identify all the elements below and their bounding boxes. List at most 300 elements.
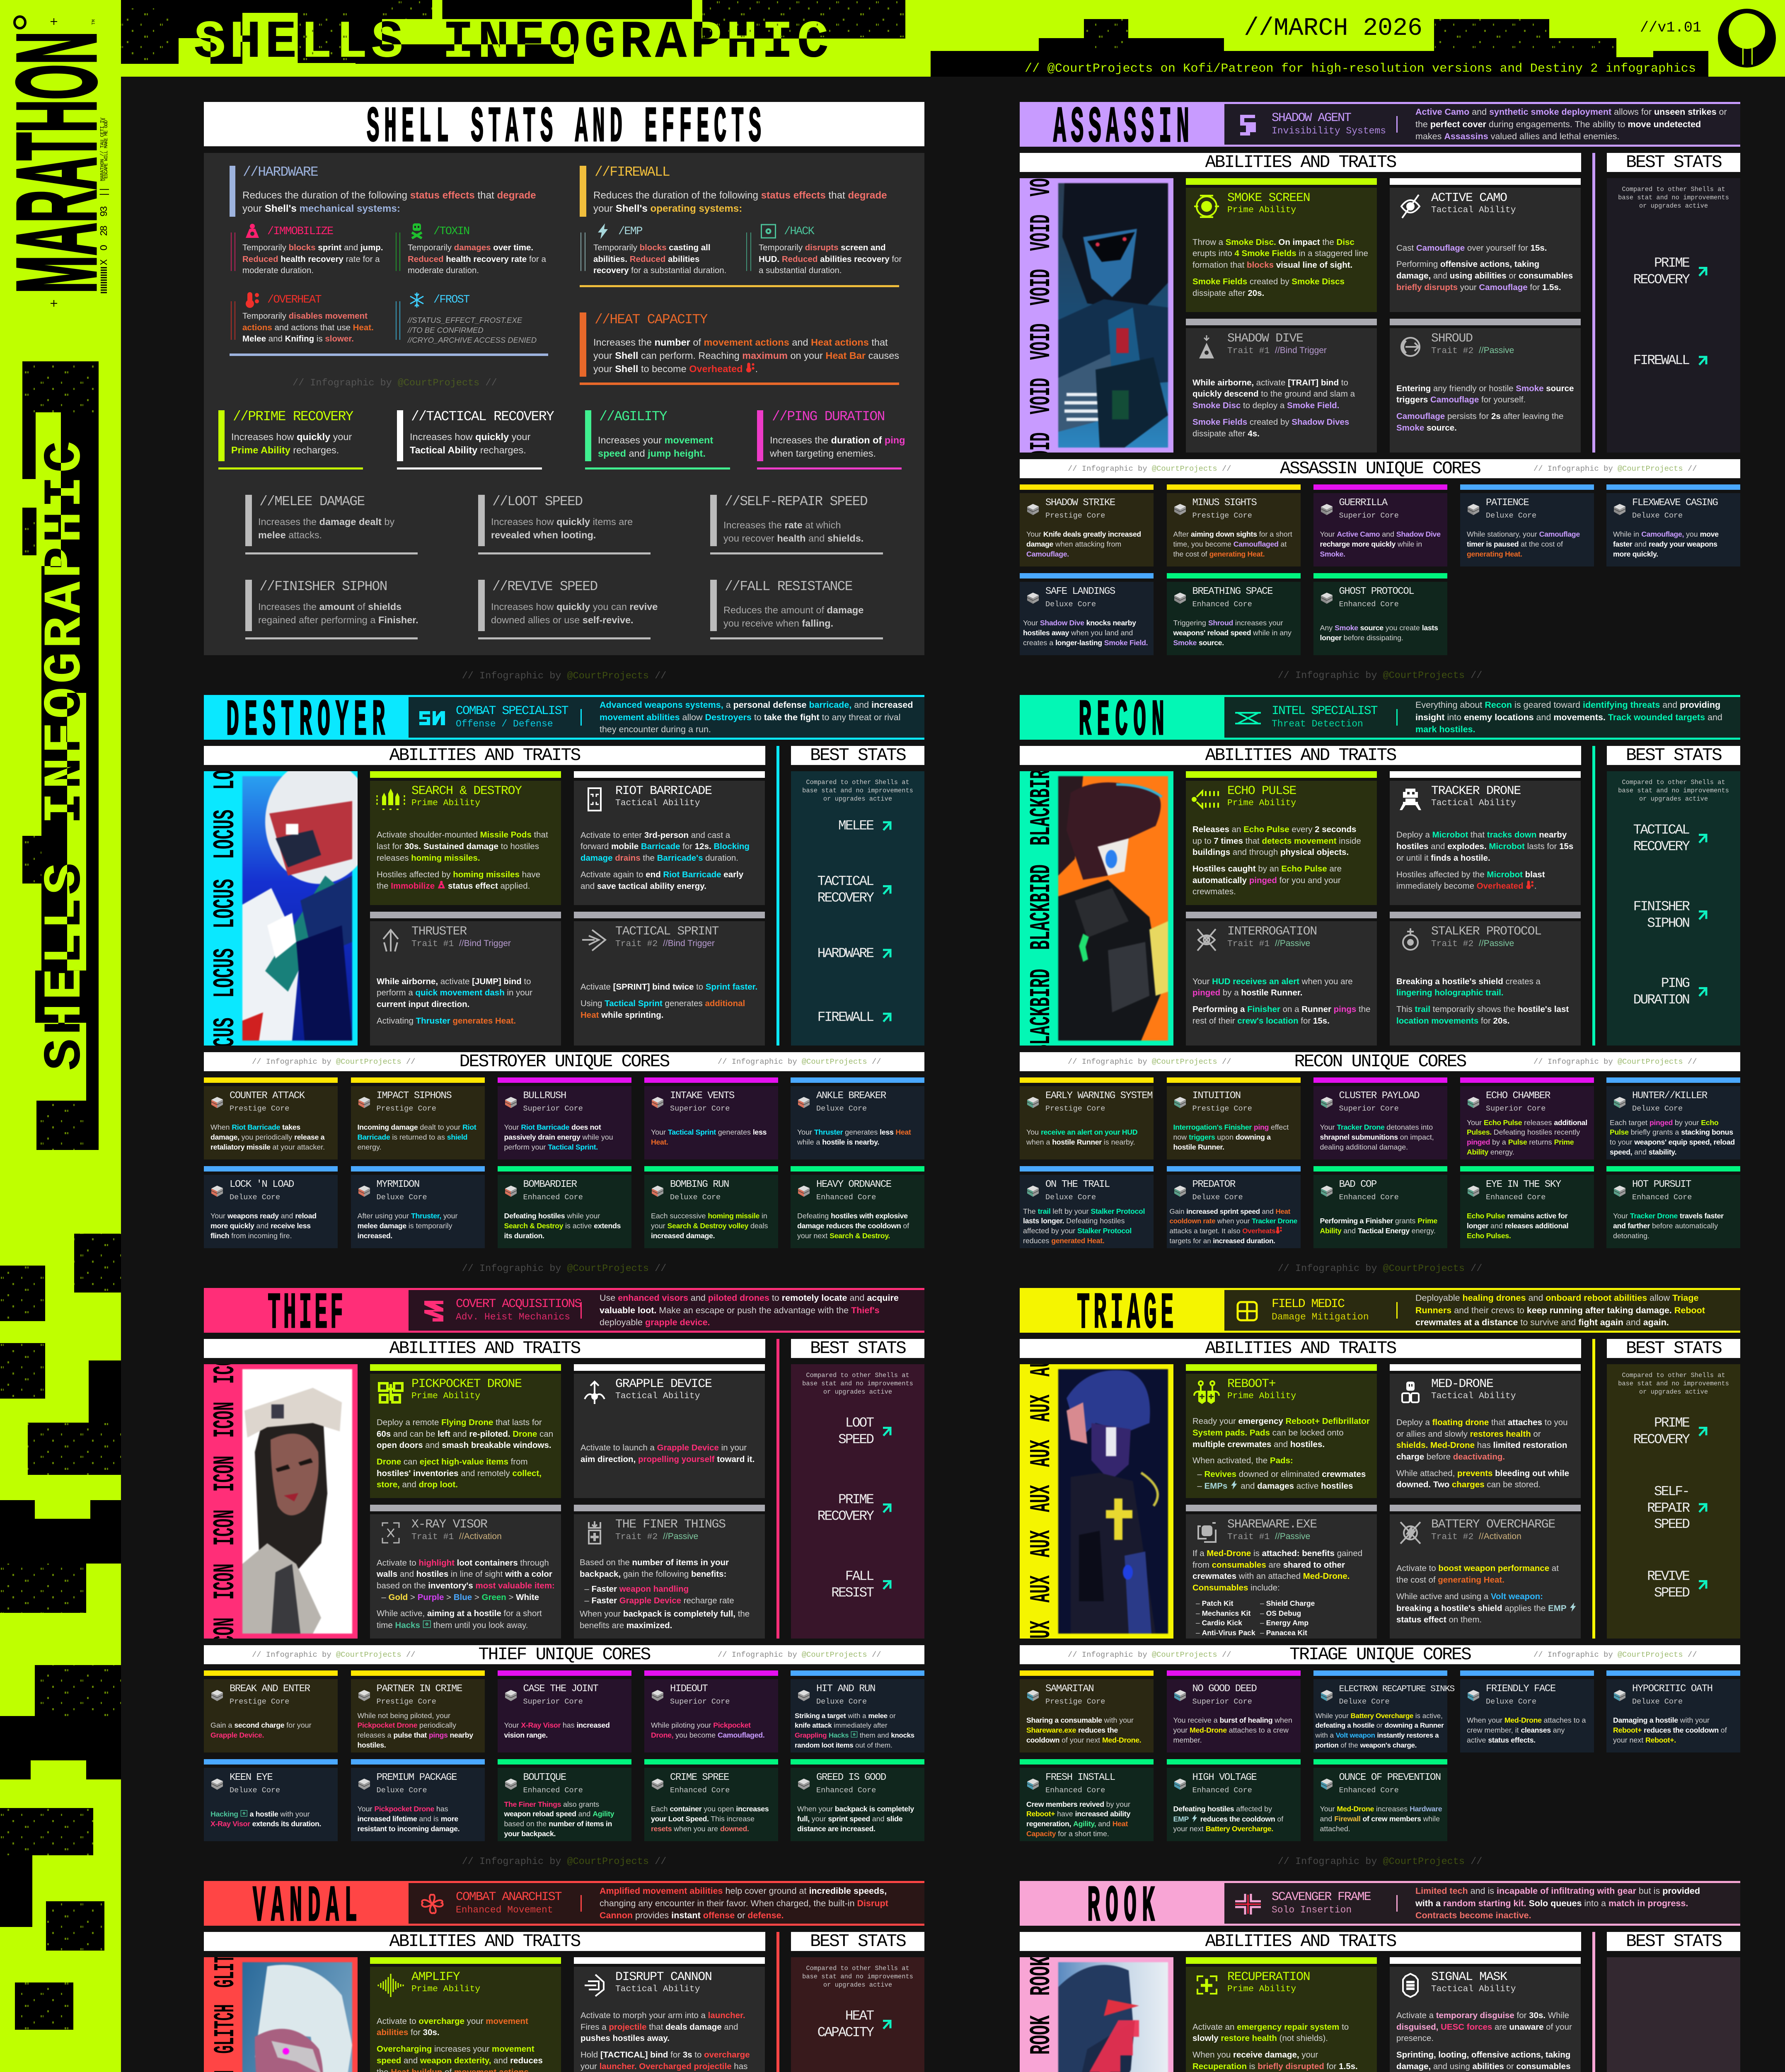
- core: break and enter: Gain a second charge for your: [210, 1721, 312, 1729]
- core: fresh install: Enhanced Core: [1045, 1786, 1105, 1795]
- section: destroyer: [204, 695, 924, 1288]
- core: minus sights: After aiming down sights for a short: [1173, 530, 1292, 538]
- ability: recuperation: Prime Ability: [1227, 1984, 1296, 1994]
- core: samaritan: Shareware.exe reduces the: [1026, 1726, 1118, 1734]
- stat: prime recovery: [1633, 1415, 1689, 1448]
- shell description header: [409, 1881, 924, 1926]
- core: counter attack: COUNTER ATTACK: [230, 1090, 305, 1101]
- core: no good deed: NO GOOD DEED: [1192, 1683, 1256, 1694]
- icon: tactical sprint: [580, 927, 610, 952]
- icon: search and destroy: [376, 787, 406, 812]
- core: echo chamber: Pulses. Defeating hostiles recently: [1467, 1128, 1580, 1136]
- status: immobilize: /IMMOBILIZE: [267, 225, 333, 238]
- core: lock n load: flinch from incoming fire.: [210, 1232, 292, 1240]
- panel: best stats: or upgrades active: [823, 1981, 892, 1989]
- ability: reboot+: Prime Ability: [1227, 1391, 1296, 1401]
- heading: best stats: BEST STATS: [810, 1931, 905, 1951]
- ability: reboot+: multiple crewmates and hostiles.: [1192, 1440, 1325, 1449]
- core: ghost protocol: Enhanced Core: [1339, 600, 1399, 609]
- shell description header: valuable loot. Make an escape or push the advantage with the Thief's: [600, 1305, 880, 1315]
- status: hack: a substantial duration.: [759, 266, 842, 275]
- trait: tactical sprint: Trait #2 //Bind Trigger: [615, 939, 715, 949]
- core: hot pursuit: detonating.: [1613, 1232, 1650, 1240]
- ability: signal mask: SIGNAL MASK: [1431, 1970, 1507, 1984]
- panel: best stats: [791, 771, 924, 1046]
- trait: stalker protocol: STALKER PROTOCOL: [1431, 925, 1541, 939]
- core: no good deed: Superior Core: [1192, 1697, 1252, 1706]
- footer watermark: // Infographic by @CourtProjects //: [1278, 670, 1482, 681]
- core: early warning system: Prestige Core: [1045, 1104, 1105, 1113]
- stat: fall resistance: Reduces the amount of damage: [723, 605, 863, 615]
- core: myrmidon: MYRMIDON: [376, 1179, 419, 1190]
- icon: signal mask: [1396, 1973, 1425, 1998]
- shell name: [1020, 1881, 1224, 1926]
- stat: hardware: //HARDWARE: [243, 165, 318, 180]
- stat: loot speed: LOOT: [845, 1416, 873, 1431]
- core: ghost protocol: Any Smoke source you create lasts: [1320, 624, 1438, 632]
- shell description header: makes Assassins valued allies and lethal enemies.: [1415, 131, 1619, 141]
- stat: firewall: your Shell's operating systems:: [593, 203, 742, 214]
- heading: abilities and traits: [1020, 746, 1581, 765]
- trait: thruster: perform a quick movement dash in your: [377, 988, 532, 997]
- ability: amplify: abilities for 30s.: [377, 2028, 440, 2037]
- trait: interrogation: Performing a Finisher on a Runner pings the: [1192, 1005, 1371, 1014]
- ability: reboot+: System pads. Pads can be locked onto: [1192, 1428, 1344, 1438]
- core: counter attack: When Riot Barricade takes: [210, 1123, 300, 1131]
- icon: the finer things: [580, 1520, 610, 1545]
- shell description header: crewmates at a distance to survive and fight again and again.: [1415, 1317, 1669, 1327]
- heading: abilities and traits: [204, 1339, 765, 1358]
- core: bullrush: Superior Core: [523, 1104, 583, 1113]
- icon: shareware.exe: [1192, 1520, 1221, 1545]
- icon: x-ray visor: [376, 1520, 406, 1545]
- core: samaritan: Sharing a consumable with your: [1026, 1716, 1134, 1724]
- core: guerrilla: Your Active Camo and Shadow Dive: [1320, 530, 1441, 538]
- shell description header: [1224, 102, 1740, 147]
- heading: best stats: [1607, 1932, 1740, 1951]
- stat: ping duration: when targeting enemies.: [770, 448, 876, 459]
- icon: shroud: [1396, 334, 1425, 359]
- core: patience: PATIENCE: [1486, 497, 1529, 508]
- core: fresh install: regeneration, Agility, and Heat: [1026, 1820, 1128, 1828]
- ability: search & destroy: releases homing missiles.: [377, 853, 480, 863]
- trait: battery overcharge: status effect on them.: [1396, 1615, 1482, 1624]
- ability: grapple device: [574, 1364, 765, 1498]
- heading: best stats: BEST STATS: [1626, 1931, 1721, 1951]
- core: hunter killer: HUNTER//KILLER: [1632, 1090, 1707, 1101]
- trait: x-ray visor: X-RAY VISOR: [411, 1518, 487, 1532]
- core: intake vents: INTAKE VENTS: [670, 1090, 734, 1101]
- ability: smoke screen: erupts into 4 Smoke Fields in a staggered line: [1192, 249, 1368, 258]
- ability: recuperation: Activate an emergency repair system to: [1192, 2022, 1349, 2032]
- core: ounce of prevention: and Firewall of crew members while: [1320, 1815, 1440, 1823]
- status: toxin: Temporarily damages over time.: [408, 243, 533, 252]
- trait: x-ray visor: walls and hostiles in line of sight with a color: [377, 1569, 552, 1579]
- stat: fall resist: RESIST: [831, 1585, 873, 1600]
- stat: prime recovery: PRIME: [1654, 255, 1689, 271]
- stat: agility: speed and jump height.: [598, 448, 706, 459]
- core: bombing run: Each successive homing missile in: [651, 1212, 767, 1220]
- shell description header: with a random starting kit. Solo queues into a match in progress.: [1415, 1898, 1688, 1908]
- shell description header: [409, 1288, 924, 1333]
- core: cluster payload: [1313, 1077, 1447, 1159]
- ability: search & destroy: SEARCH & DESTROY: [411, 784, 522, 798]
- ability: grapple device: Activate to launch a Grapple Device in your: [580, 1443, 747, 1452]
- status: frost: [396, 292, 549, 342]
- core: minus sights: MINUS SIGHTS: [1192, 497, 1256, 508]
- stat: revive speed: SPEED: [1654, 1585, 1689, 1600]
- core: myrmidon: melee damage is temporarily: [357, 1222, 452, 1230]
- core: ankle breaker: [791, 1077, 924, 1159]
- trait: x-ray visor: time Hacks them until you look away.: [377, 1621, 528, 1630]
- heading: unique cores: DESTROYER UNIQUE CORES: [459, 1051, 669, 1072]
- core: hideout: Superior Core: [670, 1697, 730, 1706]
- core: bombing run: Deluxe Core: [670, 1193, 721, 1202]
- shell description header: Offense / Defense: [456, 719, 553, 729]
- icon: field medic: [1234, 1301, 1262, 1322]
- ability: disrupt cannon: Activate to morph your arm into a launcher.: [580, 2011, 745, 2020]
- trait: tactical sprint: Heat while sprinting.: [580, 1010, 663, 1020]
- core: case the joint: CASE THE JOINT: [523, 1683, 598, 1694]
- core: lock n load: Deluxe Core: [230, 1193, 280, 1202]
- core: premium package: PREMIUM PACKAGE: [376, 1772, 457, 1783]
- stat: prime recovery: Prime Ability recharges.: [231, 445, 339, 455]
- ability: tracker drone: or until it finds a hostile.: [1396, 853, 1490, 863]
- shell description header: Use enhanced visors and piloted drones to remotely locate and acquire: [600, 1293, 899, 1303]
- trait: interrogation: Trait #1 //Passive: [1227, 939, 1310, 949]
- panel: shell stats and effects: [204, 102, 924, 682]
- trait: shareware.exe: [1186, 1505, 1377, 1639]
- core: intake vents: Superior Core: [670, 1104, 730, 1113]
- stat: tactical recovery: Increases how quickly your: [410, 431, 530, 442]
- panel: best stats: [791, 1957, 924, 2072]
- stat: heat capacity: [818, 2008, 873, 2041]
- core: case the joint: [497, 1670, 631, 1752]
- trait: tactical sprint: [574, 912, 765, 1046]
- core: impact siphons: Incoming damage dealt to your Riot: [357, 1123, 476, 1131]
- core: breathing space: weapons' reload speed while in any: [1173, 629, 1292, 637]
- stat: agility: Increases your movement: [598, 435, 713, 445]
- stat: tactical recovery: RECOVERY: [1633, 839, 1689, 854]
- core: lock n load: LOCK 'N LOAD: [230, 1179, 294, 1190]
- core: eye in the sky: [1460, 1166, 1594, 1248]
- stat: finisher siphon: //FINISHER SIPHON: [259, 579, 387, 594]
- core: flexweave casing: faster and ready your weapons: [1613, 540, 1717, 548]
- trait: battery overcharge: While active and using a Volt weapon:: [1396, 1592, 1543, 1601]
- panel: best stats: Compared to other Shells at: [1622, 1372, 1725, 1379]
- watermark: // Infographic by @CourtProjects //: [293, 378, 497, 389]
- status: emp: [580, 223, 737, 273]
- core: guerrilla: Superior Core: [1339, 511, 1399, 520]
- trait: thruster: Activating Thruster generates Heat.: [377, 1016, 516, 1026]
- core: high voltage: Enhanced Core: [1192, 1786, 1252, 1795]
- core: lock n load: Your weapons ready and reload: [210, 1212, 317, 1220]
- logo: MARATHON wordmark: TM: [92, 19, 97, 25]
- icon: scavenger frame: [1234, 1894, 1262, 1915]
- ability: grapple device: aim direction, propelling yourself toward it.: [580, 1455, 755, 1464]
- core: samaritan: cooldown of your next Med-Drone.: [1026, 1736, 1141, 1744]
- core: impact siphons: energy.: [357, 1143, 381, 1151]
- core: myrmidon: increased.: [357, 1232, 392, 1240]
- core: ounce of prevention: Your Med-Drone increases Hardware: [1320, 1805, 1442, 1813]
- core: early warning system: You receive an alert on your HUD: [1026, 1128, 1137, 1136]
- shell description header: movement abilities allow Destroyers to take the fight to any threat or rival: [600, 712, 901, 722]
- core: crime spree: your Loot Speed. This increase: [651, 1815, 755, 1823]
- shell description header: the perfect cover during engagements. The ability to move undetected: [1415, 119, 1701, 129]
- core: partner in crime: Prestige Core: [376, 1697, 436, 1706]
- ability: tracker drone: hostiles and explodes. Microbot lasts for 15s: [1396, 842, 1573, 851]
- core: guerrilla: [1313, 484, 1447, 566]
- shell description header: Everything about Recon is geared toward identifying threats and providing: [1415, 700, 1720, 710]
- core: safe landings: Deluxe Core: [1045, 600, 1096, 609]
- core: greed is good: full, your sprint speed and slide: [797, 1815, 902, 1823]
- core: intuition: now triggers upon downing a: [1173, 1133, 1271, 1141]
- ability: signal mask: Activate a temporary disguise for 30s. While: [1396, 2011, 1569, 2020]
- core: fresh install: Reboot+ have increased ability: [1026, 1810, 1130, 1818]
- core: bullrush: [497, 1077, 631, 1159]
- ability: amplify: Overcharging increases your movement: [377, 2044, 535, 2054]
- ability: recuperation: Recuperation is briefly disrupted for 1.5s.: [1192, 2062, 1358, 2071]
- icon: stalker protocol: [1396, 927, 1425, 952]
- stat: heat capacity: Increases the number of movement actions and Heat actions that: [593, 337, 888, 348]
- status: frost: /FROST: [433, 294, 469, 306]
- core: guerrilla: Smoke.: [1320, 550, 1345, 558]
- trait: shareware.exe: Consumables include:: [1192, 1583, 1280, 1593]
- status: frost: //CRYO_ARCHIVE ACCESS DENIED: [408, 336, 537, 344]
- heading: best stats: [1607, 153, 1740, 172]
- ability: riot barricade: RIOT BARRICADE: [615, 784, 711, 798]
- shell description header: Contracts become inactive.: [1415, 1910, 1531, 1920]
- core: fresh install: FRESH INSTALL: [1045, 1772, 1115, 1783]
- trait: the finer things: [574, 1505, 765, 1639]
- heading: abilities and traits: [204, 746, 765, 765]
- core: bad cop: Enhanced Core: [1339, 1193, 1399, 1202]
- core: on the trail: reduces generated Heat.: [1023, 1237, 1104, 1245]
- ability: reboot+: When activated, the Pads:: [1192, 1456, 1293, 1465]
- stat: ping duration: PING: [1661, 975, 1689, 991]
- status: emp: abilities. Reduced abilities: [593, 254, 699, 264]
- trait: shadow dive: SHADOW DIVE: [1227, 332, 1303, 346]
- shell description header: Cannon provides instant offense or defense.: [600, 1910, 784, 1920]
- trait: the finer things: benefits are maximized.: [580, 1621, 672, 1630]
- core: samaritan: Prestige Core: [1045, 1697, 1105, 1706]
- ability: echo pulse: [1186, 771, 1377, 905]
- ability: search & destroy: [370, 771, 561, 905]
- stat: prime recovery: RECOVERY: [1633, 1432, 1689, 1447]
- ability: pickpocket drone: [370, 1364, 561, 1498]
- core: counter attack: damage, you periodically release a: [210, 1133, 324, 1141]
- portrait panel: triage: [1020, 1364, 1173, 1639]
- icon: smoke screen: [1192, 194, 1221, 219]
- core: no good deed: your Med-Drone attaches to a crew: [1173, 1726, 1289, 1734]
- icon: tracker drone: [1396, 787, 1425, 812]
- icon: amplify: [376, 1973, 406, 1998]
- stat: ping duration: [757, 410, 902, 470]
- date: //MARCH 2026: [1244, 15, 1422, 43]
- core: bad cop: Performing a Finisher grants Prime: [1320, 1217, 1437, 1225]
- ability: search & destroy: Hostiles affected by homing missiles have: [377, 870, 540, 879]
- core: electron recapture sinks: portion of the weapon's charge.: [1315, 1741, 1417, 1749]
- ability: med-drone: [1390, 1364, 1581, 1498]
- trait: the finer things: Based on the number of items in your: [580, 1558, 729, 1567]
- ability: search & destroy: last for 30s. Sustained damage to hostiles: [377, 842, 539, 851]
- stat: prime recovery: Increases how quickly your: [231, 431, 352, 442]
- portrait panel: vandal: [204, 1957, 358, 2072]
- trait: the finer things: backpack, gain the following benefits:: [580, 1569, 726, 1579]
- ability: pickpocket drone: Drone can eject high-value items from: [377, 1457, 528, 1467]
- stat: ping duration: DURATION: [1633, 992, 1689, 1007]
- ability: echo pulse: Releases an Echo Pulse every 2 seconds: [1192, 825, 1356, 834]
- core: boutique: BOUTIQUE: [523, 1772, 566, 1783]
- core: cluster payload: dealing additional damage.: [1320, 1143, 1408, 1151]
- ability: active camo: Cast Camouflage over yourself for 15s.: [1396, 243, 1547, 253]
- heading: best stats: [791, 746, 924, 765]
- shell description header: insight into enemy locations and movements. Track wounded targets and: [1415, 712, 1722, 722]
- ability: riot barricade: Activate again to end Riot Barricade early: [580, 870, 743, 879]
- decorative glitch blocks lower strip: [0, 1234, 121, 2030]
- heading: unique cores: // Infographic by @CourtProjects //: [718, 1057, 881, 1066]
- core: bombing run: [644, 1166, 778, 1248]
- core: ghost protocol: GHOST PROTOCOL: [1339, 586, 1414, 597]
- ability: signal mask: Tactical Ability: [1431, 1984, 1516, 1994]
- core: hunter killer: Pulse briefly grants a stacking bonus: [1610, 1128, 1733, 1136]
- core: electron recapture sinks: ELECTRON RECAPTURE SINKS: [1339, 1684, 1454, 1694]
- panel: best stats: [1607, 771, 1740, 1046]
- core: ounce of prevention: attached.: [1320, 1825, 1350, 1833]
- core: keen eye: [204, 1759, 338, 1841]
- stat: heat capacity: //HEAT CAPACITY: [595, 312, 707, 327]
- shell description header: [409, 695, 924, 740]
- ability: echo pulse: up to 7 times that detects movement inside: [1192, 836, 1361, 846]
- ability: med-drone: downed. Two charges can be stored.: [1396, 1480, 1541, 1489]
- status: frost: //TO BE CONFIRMED: [408, 326, 484, 334]
- trait: thruster: Trait #1 //Bind Trigger: [411, 939, 511, 949]
- core: predator: cooldown rate when your Tracker Drone: [1169, 1217, 1297, 1225]
- shell description header: Solo Insertion: [1272, 1905, 1352, 1915]
- status: hack: Temporarily disrupts screen and: [759, 243, 885, 252]
- core: eye in the sky: Echo Pulses.: [1467, 1232, 1511, 1240]
- shell description header: deployable grapple device.: [600, 1317, 710, 1327]
- section: triage: [1020, 1288, 1740, 1881]
- panel: best stats: [1607, 1364, 1740, 1639]
- trait: shadow dive: [1186, 319, 1377, 453]
- ability: signal mask: [1390, 1957, 1581, 2072]
- footer watermark: // Infographic by @CourtProjects //: [462, 670, 666, 682]
- heading: unique cores: // Infographic by @CourtProjects //: [1068, 464, 1231, 473]
- stat: fall resistance: [710, 580, 883, 639]
- core: bombardier: Defeating hostiles while your: [504, 1212, 600, 1220]
- core: bad cop: [1313, 1166, 1447, 1248]
- core: predator: PREDATOR: [1192, 1179, 1235, 1190]
- heading: unique cores: // Infographic by @CourtProjects //: [1533, 1057, 1697, 1066]
- stat: tactical recovery: [1633, 822, 1689, 854]
- core: counter attack: [204, 1077, 338, 1159]
- core: boutique: Enhanced Core: [523, 1786, 583, 1795]
- core: on the trail: [1020, 1166, 1154, 1248]
- shell description header: they encounter during a run.: [600, 724, 711, 734]
- core: shadow strike: SHADOW STRIKE: [1045, 497, 1115, 508]
- status: toxin: Reduced health recovery rate for a: [408, 254, 546, 264]
- core: minus sights: [1167, 484, 1300, 566]
- trait: shareware.exe: from consumables are shared to other: [1192, 1560, 1345, 1570]
- trait: stalker protocol: lingering holographic trail.: [1396, 988, 1504, 997]
- core: samaritan: [1020, 1670, 1154, 1752]
- icon: combat anarchist: [418, 1894, 446, 1915]
- trait: shareware.exe: – Shield Charge: [1260, 1599, 1315, 1607]
- panel: best stats: [1607, 1957, 1740, 2072]
- core: guerrilla: GUERRILLA: [1339, 497, 1387, 508]
- heading: unique cores: [204, 1645, 924, 1664]
- core: ankle breaker: ANKLE BREAKER: [816, 1090, 886, 1101]
- stat: loot speed: [838, 1415, 873, 1448]
- heading: abilities and traits: ABILITIES AND TRAITS: [1205, 152, 1396, 172]
- heading: abilities and traits: ABILITIES AND TRAITS: [1205, 1931, 1396, 1951]
- ability: echo pulse: ECHO PULSE: [1227, 784, 1296, 798]
- ability: smoke screen: dissipate after 20s.: [1192, 288, 1264, 298]
- shell description header: SCAVENGER FRAME: [1272, 1890, 1371, 1904]
- icon: shadow dive: [1192, 334, 1221, 359]
- core: ankle breaker: Deluxe Core: [816, 1104, 867, 1113]
- core: greed is good: Enhanced Core: [816, 1786, 876, 1795]
- trait: shareware.exe: crewmates with an attached Med-Drone.: [1192, 1571, 1350, 1581]
- core: intake vents: Your Tactical Sprint generates less: [651, 1128, 767, 1136]
- core: high voltage: HIGH VOLTAGE: [1192, 1772, 1256, 1783]
- core: hit and run: Striking a target with a melee or: [795, 1712, 896, 1720]
- stat: heat capacity: CAPACITY: [818, 2025, 873, 2040]
- heading: unique cores: RECON UNIQUE CORES: [1294, 1051, 1466, 1072]
- ability: echo pulse: Hostiles caught by an Echo Pulse are: [1192, 864, 1342, 874]
- core: fresh install: [1020, 1759, 1154, 1841]
- ability: disrupt cannon: your launcher. Overcharged projectile has: [580, 2062, 747, 2071]
- shell description header: Amplified movement abilities help cover ground at incredible speeds,: [600, 1886, 887, 1896]
- core: crime spree: CRIME SPREE: [670, 1772, 729, 1783]
- ability: tracker drone: immediately become Overheated .: [1396, 881, 1536, 891]
- core: cluster payload: Superior Core: [1339, 1104, 1399, 1113]
- stat: fall resistance: //FALL RESISTANCE: [725, 579, 852, 594]
- footer watermark: // Infographic by @CourtProjects //: [462, 1263, 666, 1274]
- ability: riot barricade: Activate to enter 3rd-person and cast a: [580, 830, 730, 840]
- footer watermark: // Infographic by @CourtProjects //: [1278, 1263, 1482, 1274]
- icon: active camo: [1396, 194, 1425, 219]
- core: greed is good: distance are increased.: [797, 1825, 876, 1833]
- stat: heat capacity: [580, 312, 899, 385]
- core: ounce of prevention: [1313, 1759, 1447, 1841]
- heading: unique cores: [1020, 1645, 1740, 1664]
- core: safe landings: [1020, 573, 1154, 655]
- trait: shadow dive: While airborne, activate [TRAIT] bind to: [1192, 378, 1348, 387]
- shell description header: Advanced weapons systems, a personal defense barricade, and increased: [600, 700, 913, 710]
- core: bombing run: BOMBING RUN: [670, 1179, 729, 1190]
- ability: disrupt cannon: [574, 1957, 765, 2072]
- trait: shareware.exe: – Energy Amp: [1260, 1619, 1309, 1627]
- core: premium package: [351, 1759, 485, 1841]
- heading: best stats: [791, 1339, 924, 1358]
- heading: unique cores: THIEF UNIQUE CORES: [478, 1644, 650, 1665]
- core: ankle breaker: Your Thruster generates less Heat: [797, 1128, 911, 1136]
- status: frost: //STATUS_EFFECT_FROST.EXE: [408, 316, 522, 324]
- shell description header: [1224, 1288, 1740, 1333]
- stat: revive speed: [478, 580, 651, 639]
- ability: active camo: [1390, 178, 1581, 312]
- shell description header: Limited tech and is incapable of infiltrating with gear but is provided: [1415, 1886, 1700, 1896]
- core: break and enter: Prestige Core: [230, 1697, 289, 1706]
- core: electron recapture sinks: Deluxe Core: [1339, 1697, 1390, 1706]
- core: bombardier: [497, 1166, 631, 1248]
- core: heavy ordnance: Defeating hostiles with explosive: [797, 1212, 908, 1220]
- icon: grapple device: [580, 1380, 610, 1405]
- shell description header: mark hostiles.: [1415, 724, 1475, 734]
- shell name: [1020, 695, 1224, 740]
